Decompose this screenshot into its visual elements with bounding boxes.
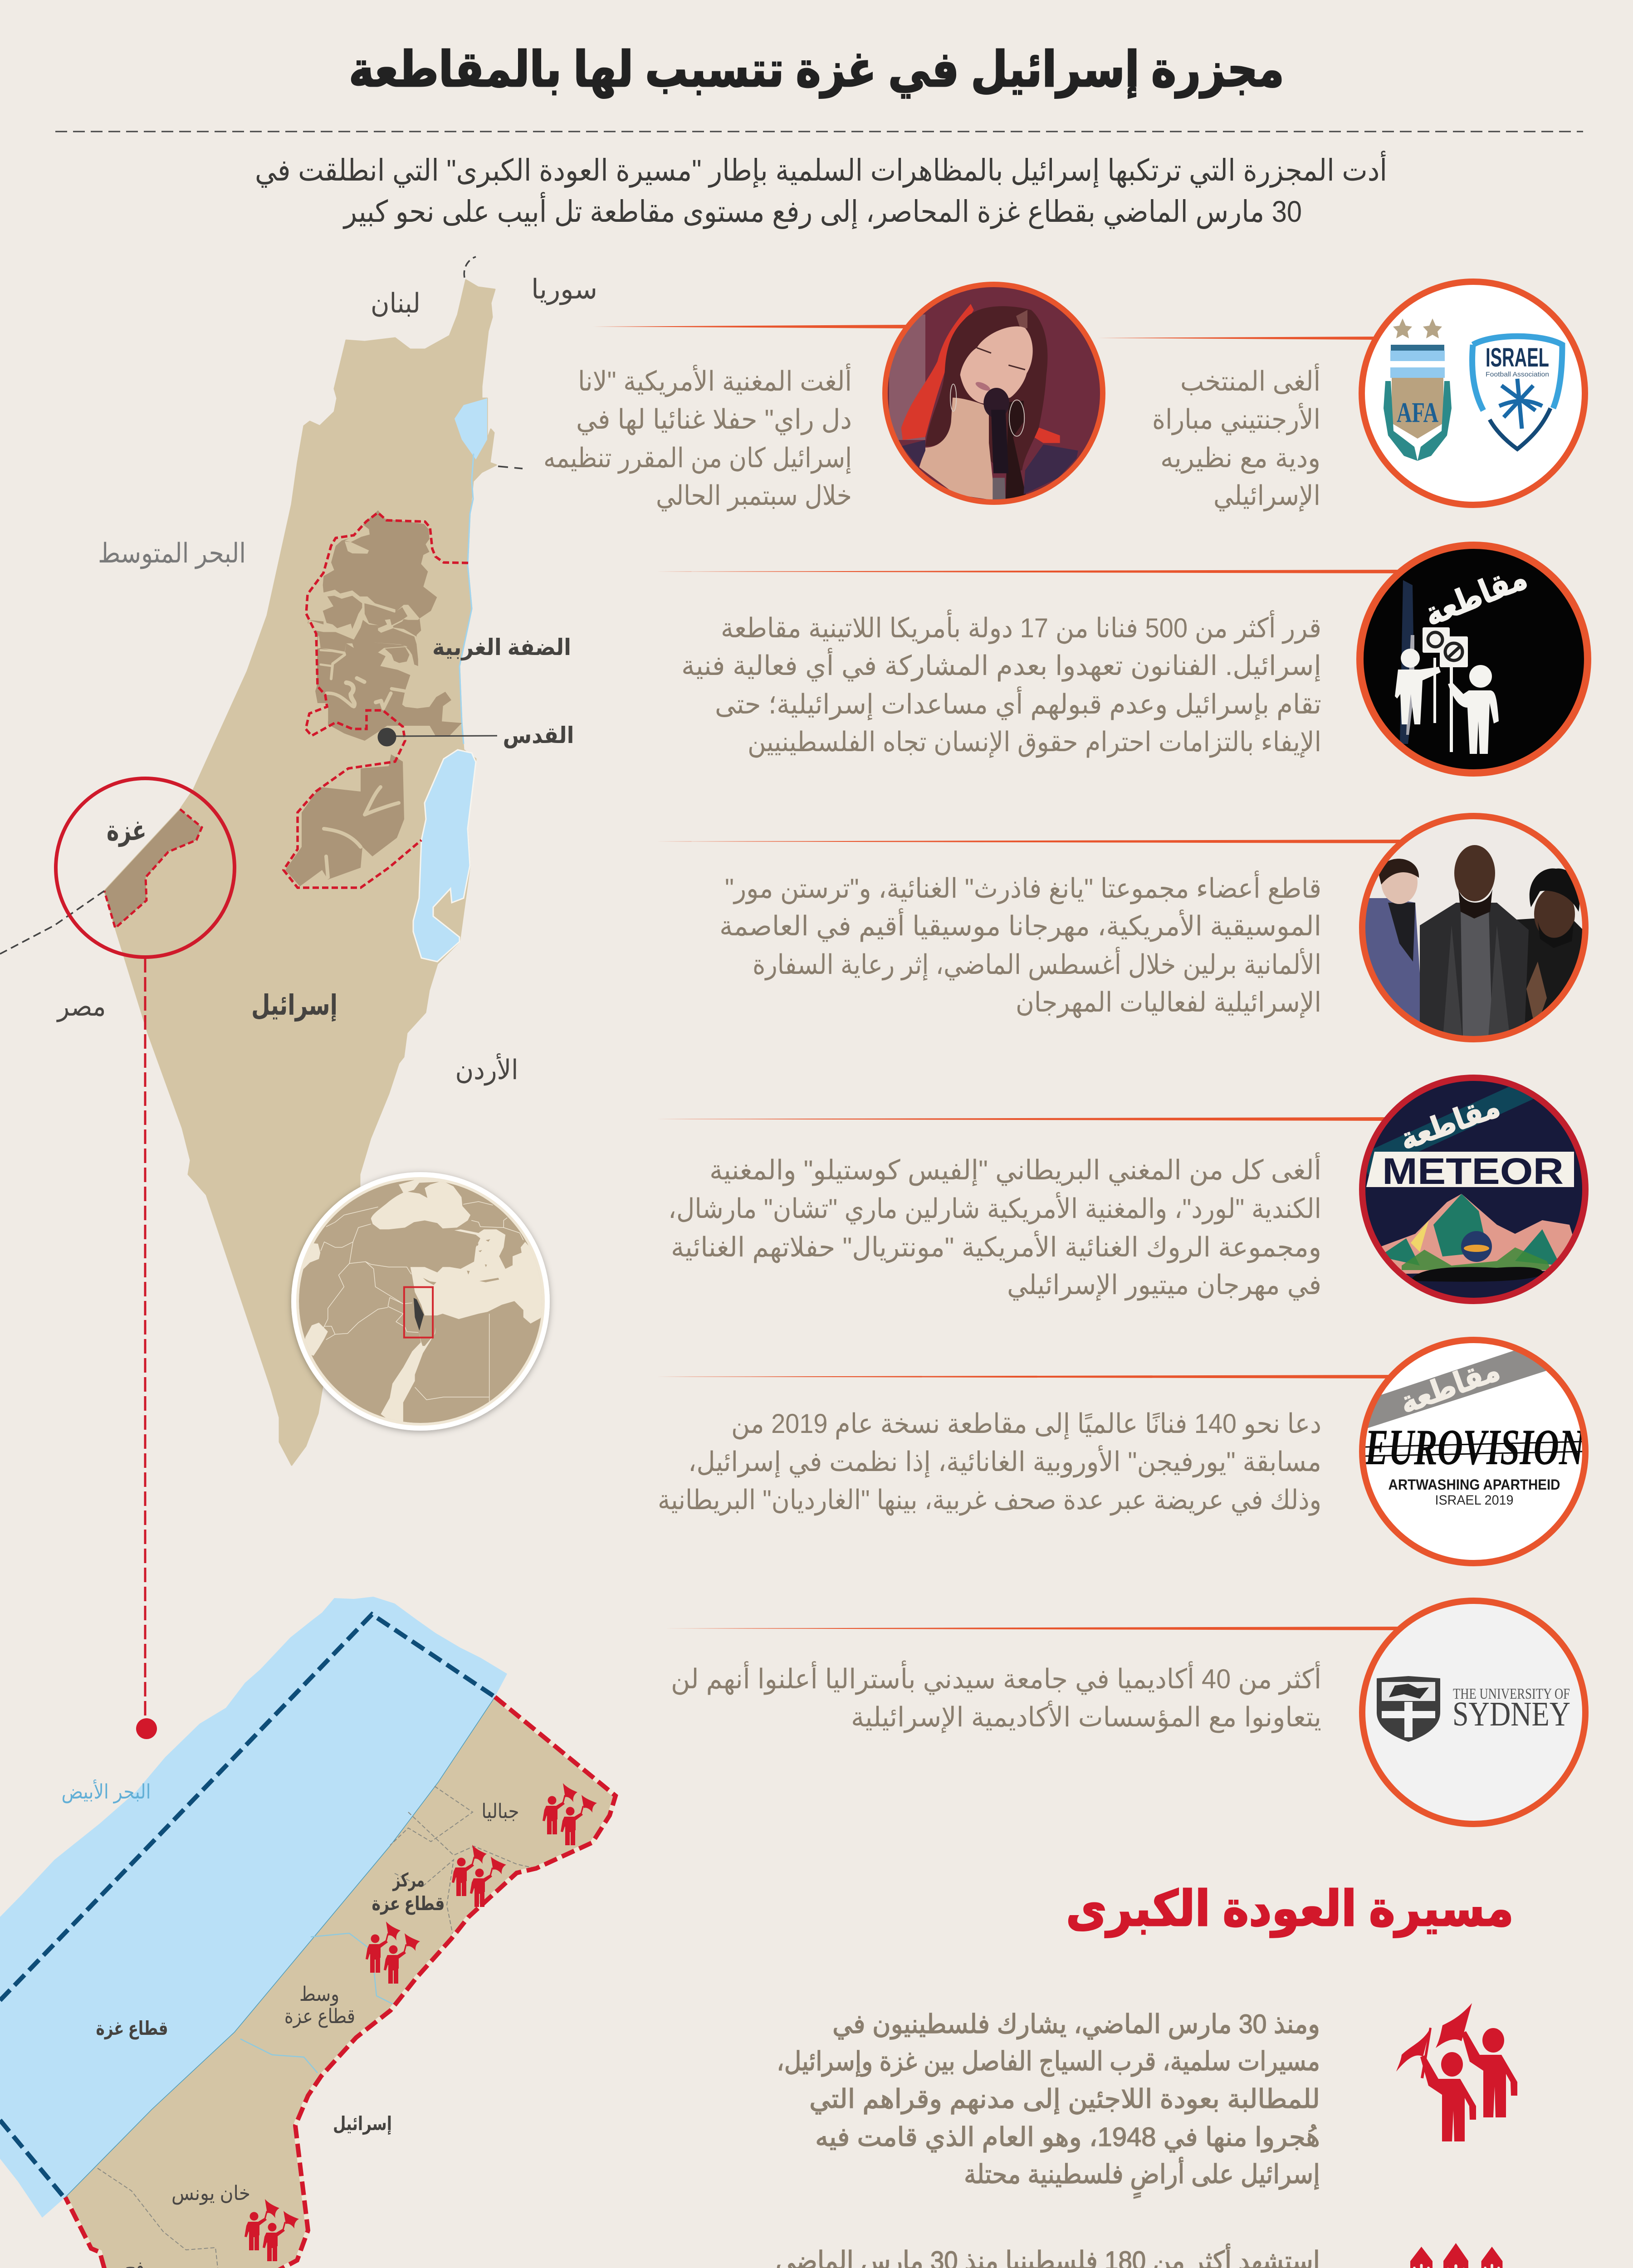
image: University of Sydney logo bbox=[1356, 1597, 1592, 1833]
text: قاطع أعضاء مجموعتا "يانغ فاذرث" الغنائية، و"ترستن مور" bbox=[725, 870, 1321, 904]
item 1: Argentina football match bbox=[1098, 282, 1585, 512]
text: ومجموعة الروك الغنائية الأمريكية "مونتريال" حفلاتهم الغنائية bbox=[671, 1231, 1321, 1263]
image: University of Sydney logo: THE UNIVERSITY OF bbox=[1453, 1686, 1570, 1702]
text: الألمانية برلين خلال أغسطس الماضي، إثر رعاية السفارة bbox=[753, 947, 1321, 981]
text: أكثر من 40 أكاديميا في جامعة سيدني بأستراليا أعلنوا أنهم لن bbox=[671, 1660, 1321, 1695]
item 6: Eurovision bbox=[656, 1334, 1592, 1569]
Jerusalem marker bbox=[377, 728, 497, 747]
map labels: غزة bbox=[107, 815, 147, 847]
Gaza map labels: قطاع غزة bbox=[96, 2018, 168, 2040]
Gaza territory bbox=[104, 809, 202, 928]
text: الكندية "لورد"، والمغنية الأمريكية شارلين ماري "تشان" مارشال، bbox=[668, 1192, 1321, 1225]
text: دل راي" حفلا غنائيا لها في bbox=[576, 404, 852, 435]
image: band photo bbox=[1356, 810, 1592, 1046]
connector bbox=[656, 1117, 1390, 1121]
text: الأرجنتيني مباراة bbox=[1152, 403, 1320, 435]
text: ودية مع نظيريه bbox=[1160, 443, 1320, 474]
image: University of Sydney logo: SYDNEY bbox=[1452, 1695, 1570, 1733]
text bbox=[543, 363, 852, 512]
map labels: البحر المتوسط bbox=[98, 538, 246, 569]
item 7: University of Sydney bbox=[664, 1597, 1592, 1833]
connector bbox=[1098, 337, 1374, 340]
map labels: إسرائيل bbox=[251, 990, 337, 1022]
ring bbox=[1362, 282, 1585, 505]
land outline bbox=[104, 280, 496, 1465]
text bbox=[671, 1660, 1321, 1733]
text: march description: ومنذ 30 مارس الماضي، يشارك فلسطينيون في bbox=[832, 2009, 1320, 2040]
text: march description bbox=[777, 2009, 1320, 2199]
connector bbox=[664, 1627, 1402, 1630]
connector bbox=[656, 1375, 1395, 1378]
connector bbox=[593, 325, 907, 328]
text: march description: مسيرات سلمية، قرب السياج الفاصل بين غزة وإسرائيل، bbox=[777, 2047, 1320, 2077]
map: Israel and Palestine bbox=[0, 257, 597, 1739]
text: الإسرائيلي bbox=[1213, 480, 1320, 512]
text: تقام بإسرائيل وعدم قبولهم أي مساعدات إسرائيلية؛ حتى bbox=[715, 686, 1321, 720]
Dead Sea bbox=[413, 750, 476, 962]
naval blockade border bbox=[0, 1614, 495, 2197]
text bbox=[719, 870, 1321, 1018]
text: ألغى كل من المغني البريطاني "إلفيس كوستيلو" والمغنية bbox=[709, 1152, 1321, 1186]
Sea of Galilee bbox=[455, 398, 487, 459]
Gaza map labels: البحر الأبيض bbox=[62, 1779, 151, 1804]
image: Eurovision boycott logo: ISRAEL 2019 bbox=[1435, 1493, 1513, 1508]
text: إسرائيل كان من المقرر تنظيمه bbox=[543, 443, 852, 474]
map labels: الأردن bbox=[455, 1053, 518, 1086]
Israel FA badge: Football Association bbox=[1486, 371, 1549, 378]
Gaza map labels: قطاع عزة bbox=[284, 2005, 355, 2028]
image: Meteor festival poster: مقاطعة bbox=[1395, 1089, 1504, 1156]
title: مجزرة إسرائيل في غزة تتسبب لها بالمقاطعة bbox=[349, 42, 1284, 98]
section heading: مسيرة العودة الكبرى bbox=[1066, 1881, 1514, 1938]
text: الموسيقية الأمريكية، مهرجانا موسيقيا أقيم في العاصمة bbox=[719, 908, 1321, 942]
locator globe bbox=[291, 1172, 550, 1431]
image: Eurovision boycott logo bbox=[1356, 1334, 1592, 1569]
map: Gaza Strip detail bbox=[0, 1597, 616, 2268]
text: خلال سبتمبر الحالي bbox=[656, 480, 852, 512]
text: دعا نحو 140 فنانًا عالميًا إلى مقاطعة نسخة عام 2019 من bbox=[731, 1408, 1321, 1440]
Gaza land border bbox=[65, 1697, 616, 2268]
Gaza map labels: قطاع عزة bbox=[372, 1893, 445, 1915]
intro text: أدت المجزرة التي ترتكبها إسرائيل بالمظاهرات السلمية بإطار "مسيرة العودة الكبرى" التي انطلقت في bbox=[255, 151, 1387, 188]
image: Eurovision boycott logo: مقاطعة bbox=[1395, 1353, 1504, 1420]
map labels: الضفة الغربية bbox=[432, 635, 571, 661]
text: مسابقة "يورفيجن" الأوروبية الغانائية، إذا نظمت في إسرائيل، bbox=[688, 1445, 1321, 1478]
text: march description: هُجروا منها في 1948، وهو العام الذي قامت فيه bbox=[815, 2122, 1320, 2153]
text bbox=[668, 1152, 1321, 1301]
West Bank territory bbox=[285, 510, 462, 886]
image: Meteor festival poster: METEOR bbox=[1382, 1151, 1564, 1192]
icon: marchers with flags bbox=[1396, 2003, 1517, 2141]
AFA badge: AFA bbox=[1397, 397, 1438, 428]
West Bank border bbox=[284, 513, 468, 888]
image: boycott figures bbox=[1356, 540, 1592, 780]
map labels: القدس bbox=[503, 723, 574, 748]
text: الإسرائيلية لفعاليات المهرجان bbox=[1016, 987, 1321, 1018]
Israel FA badge bbox=[1472, 336, 1562, 449]
Gaza map labels: جباليا bbox=[482, 1800, 519, 1823]
connector bbox=[656, 570, 1402, 573]
image: singer photo bbox=[880, 277, 1111, 508]
Gaza map labels: إسرائيل bbox=[333, 2113, 392, 2135]
text: march description: للمطالبة بعودة اللاجئين إلى مدنهم وقراهم التي bbox=[809, 2084, 1320, 2115]
ring bbox=[1362, 1078, 1585, 1301]
Gaza locator circle bbox=[56, 778, 235, 957]
sea area bbox=[0, 1597, 507, 2218]
Gaza map labels: وسط bbox=[299, 1983, 339, 2006]
icon: martyrs tombstones bbox=[1406, 2243, 1506, 2268]
image: Meteor festival poster bbox=[1356, 1070, 1592, 1306]
text: الإيفاء بالتزامات احترام حقوق الإنسان تجاه الفلسطينيين bbox=[748, 727, 1321, 758]
map labels: لبنان bbox=[371, 288, 420, 318]
text: وذلك في عريضة عبر عدة صحف غربية، بينها "الغارديان" البريطانية bbox=[658, 1485, 1321, 1516]
Gaza map labels bbox=[57, 1779, 519, 2268]
map labels: سوريا bbox=[531, 274, 597, 305]
text: march description: إسرائيل على أراضٍ فلسطينية محتلة bbox=[964, 2157, 1320, 2199]
item 2: Lana Del Rey bbox=[543, 277, 1111, 512]
connector bbox=[656, 840, 1404, 843]
Gaza map labels: مركز bbox=[392, 1869, 425, 1892]
text bbox=[1152, 363, 1320, 512]
ring bbox=[885, 284, 1103, 502]
Gaza map labels: خان يونس bbox=[171, 2182, 250, 2205]
ring bbox=[1362, 816, 1585, 1039]
map labels bbox=[56, 274, 597, 1086]
land area bbox=[65, 1697, 616, 2268]
item 4: Young Fathers and Thurston Moore bbox=[656, 810, 1592, 1046]
AFA badge bbox=[1384, 318, 1452, 461]
intro text: 30 مارس الماضي بقطاع غزة المحاصر، إلى رفع مستوى مقاطعة تل أبيب على نحو كبير bbox=[342, 192, 1302, 230]
text: إسرائيل. الفنانون تعهدوا بعدم المشاركة في أي فعالية فنية bbox=[681, 648, 1321, 682]
ring bbox=[1362, 1601, 1585, 1824]
text: قرر أكثر من 500 فنانا من 17 دولة بأمريكا اللاتينية مقاطعة bbox=[721, 609, 1321, 644]
internal boundaries bbox=[98, 1786, 536, 2268]
ring bbox=[1362, 1340, 1585, 1563]
protest icons bbox=[156, 1783, 597, 2268]
map labels: مصر bbox=[56, 991, 106, 1022]
text bbox=[658, 1408, 1321, 1516]
item 3: Latin American artists bbox=[656, 540, 1592, 780]
item 5: Meteor festival bbox=[656, 1070, 1592, 1306]
intro text bbox=[255, 151, 1387, 230]
text: ألغى المنتخب bbox=[1180, 363, 1320, 396]
text: في مهرجان ميتيور الإسرائيلي bbox=[1007, 1270, 1321, 1301]
text: يتعاونوا مع المؤسسات الأكاديمية الإسرائيلية bbox=[851, 1701, 1321, 1733]
Israel FA badge: ISRAEL bbox=[1486, 343, 1549, 372]
boycott label: مقاطعة bbox=[1419, 559, 1532, 633]
image: football association logos bbox=[1362, 282, 1585, 505]
text bbox=[681, 609, 1321, 758]
ring bbox=[1360, 545, 1588, 773]
image: Eurovision boycott logo: ARTWASHING APARTHEID bbox=[1388, 1476, 1560, 1493]
text: ألغت المغنية الأمريكية "لانا bbox=[578, 363, 852, 397]
